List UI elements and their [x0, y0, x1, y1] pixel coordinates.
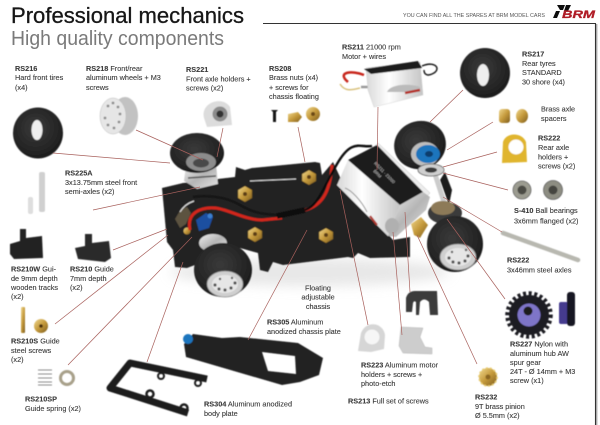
label: RS217: Rear tyres	[522, 59, 556, 68]
label: RS227: screw (x1)	[510, 376, 544, 385]
label: brass axle spacers: Brass axle	[541, 104, 575, 114]
label: RS225A: 3x13.75mm steel front	[65, 178, 137, 187]
label: RS210: (x2)	[70, 283, 83, 292]
label: RS210S: steel screws	[11, 346, 51, 355]
part: RS217 rear tire	[460, 48, 510, 98]
label: RS210S: RS210S Guide	[11, 336, 60, 346]
label: RS222 axles: 3x46mm steel axles	[507, 266, 572, 274]
label: RS225A: semi-axles (x2)	[65, 187, 114, 196]
label: RS217: RS217	[522, 50, 544, 58]
label: RS217: 30 shore (x4)	[522, 78, 565, 86]
assembled motor	[337, 143, 430, 238]
title	[11, 3, 244, 50]
label: RS222 holders: Rear axle	[538, 143, 569, 152]
label: S-410: S-410 Ball bearings	[514, 206, 578, 215]
label: RS210W: RS210W Gui-	[11, 264, 56, 274]
label: RS305: anodized chassis plate	[267, 327, 341, 336]
label: RS210S: (x2)	[11, 355, 24, 364]
label: RS232: RS232	[475, 392, 497, 402]
assembled chassis	[162, 162, 410, 272]
part: RS232 brass pinion	[479, 368, 497, 386]
label: RS227: RS227 Nylon with	[510, 340, 568, 348]
label: RS304: body plate	[204, 409, 238, 418]
header note: YOU CAN FIND ALL THE SPARES AT BRM MODEL CARS	[403, 13, 546, 19]
part: RS222 steel axle	[503, 233, 578, 260]
label: RS208: + screws for	[269, 83, 309, 92]
logo: BRM: BRM	[562, 9, 596, 21]
part: S-410 ball bearings	[513, 180, 562, 200]
label: RS227: aluminum hub AW	[510, 349, 569, 358]
label: RS223: holders + screws +	[361, 370, 422, 379]
label: RS208: RS208	[269, 64, 291, 73]
label: RS210SP: RS210SP	[25, 394, 57, 404]
rear axle and bearing	[418, 164, 452, 205]
part: RS216 front tire	[13, 108, 63, 158]
label: floating chassis: adjustable	[301, 292, 335, 302]
wiring	[189, 146, 372, 230]
part: brass axle spacers	[499, 109, 528, 123]
label: RS211: Motor + wires	[342, 52, 386, 61]
label: RS211: RS211 21000 rpm	[342, 42, 401, 52]
label: RS213: RS213 Full set of screws	[348, 396, 429, 406]
label: RS305: RS305 Aluminum	[267, 318, 323, 326]
label: RS218: screws	[86, 83, 109, 92]
label: RS210W: wooden tracks	[10, 283, 58, 292]
assembled chassis drop shadow	[170, 258, 450, 286]
front guide electronics	[175, 207, 191, 228]
part: RS221 axle holder	[204, 101, 232, 127]
part: RS210W guide	[10, 229, 43, 259]
label: RS216: Hard front tires	[15, 73, 64, 82]
rear top wheel	[389, 115, 451, 175]
label: RS210W: de 9mm depth	[11, 274, 58, 283]
part: RS227 spur gear	[508, 292, 575, 336]
front top wheel	[170, 133, 224, 189]
label: RS222 axles: RS222	[507, 256, 529, 264]
title: Professional mechanics	[11, 3, 244, 28]
label: RS225A: RS225A	[65, 168, 93, 178]
part: RS210S guide screw	[21, 307, 48, 333]
label: RS304: RS304 Aluminum anodized	[204, 400, 292, 408]
part: RS304 body plate	[110, 363, 207, 413]
frame border	[263, 24, 597, 425]
label: RS210: 7mm depth	[70, 274, 107, 283]
label: RS217: STANDARD	[522, 68, 562, 77]
rear bottom wheel with spur gear	[427, 201, 483, 272]
label: RS218: RS218 Front/rear	[86, 64, 142, 73]
part: RS218 aluminum wheel	[100, 97, 138, 135]
label: RS218: aluminum wheels + M3	[86, 73, 161, 82]
leader lines	[53, 90, 508, 365]
label: RS222 holders: RS222	[538, 134, 560, 142]
part: RS210SP guide spring	[38, 370, 74, 385]
label: RS222 holders: screws (x2)	[538, 162, 575, 170]
label: RS210SP: Guide spring (x2)	[25, 404, 81, 413]
part: photo-etch silver	[399, 327, 432, 354]
label: RS227: spur gear	[510, 358, 541, 367]
brass nuts on chassis	[238, 170, 333, 243]
label: brass axle spacers: spacers	[541, 114, 567, 123]
label: RS227: 24T - Ø 14mm + M3	[510, 367, 575, 376]
part: photo-etch dark	[406, 291, 438, 315]
front bottom wheel	[194, 234, 252, 297]
label: RS216: RS216	[15, 64, 37, 73]
part: RS223 motor holder	[358, 324, 385, 352]
label: RS210: RS210 Guide	[70, 264, 114, 274]
label: RS208: chassis floating	[269, 92, 319, 101]
part: RS225A steel semi-axles	[28, 172, 45, 214]
part: RS208 brass nuts	[271, 107, 320, 122]
part: RS305 chassis plate	[183, 334, 323, 385]
label: floating chassis: chassis	[306, 302, 331, 311]
part: RS210 guide	[75, 234, 111, 262]
label: RS232: Ø 5.5mm (x2)	[475, 411, 520, 420]
motor pinion	[411, 217, 428, 238]
label: RS221: RS221	[186, 65, 208, 74]
part: RS211 motor	[340, 61, 437, 107]
label: S-410: 3x6mm flanged (x2)	[514, 216, 578, 226]
logo: BRM	[553, 5, 596, 21]
assembled motor: BRM	[372, 169, 383, 179]
subtitle: High quality components	[11, 28, 224, 50]
label: RS221: screws (x2)	[186, 84, 223, 92]
label: RS232: 9T brass pinion	[475, 402, 525, 411]
part: RS222 rear axle holder	[502, 134, 527, 163]
label: RS223: RS223 Aluminum motor	[361, 360, 438, 370]
label: RS216: (x4)	[15, 83, 28, 92]
label: RS221: Front axle holders +	[186, 74, 251, 84]
label: floating chassis: Floating	[305, 284, 331, 292]
label: RS210W: (x2)	[11, 292, 24, 301]
assembled motor: RS211 · 21000	[373, 161, 397, 185]
label: RS222 holders: holders +	[538, 152, 568, 162]
label: RS208: Brass nuts (x4)	[269, 73, 318, 82]
label: RS223: photo-etch	[361, 379, 395, 388]
